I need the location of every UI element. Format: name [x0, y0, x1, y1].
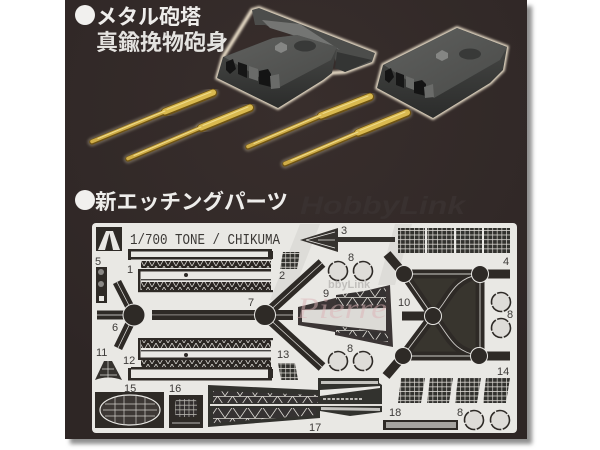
- heading: metal turrets: メタル砲塔: [96, 6, 201, 29]
- part 16: square deck: [169, 395, 203, 428]
- part numbers: 6: [112, 322, 118, 334]
- part numbers: [95, 225, 513, 434]
- part numbers: 16: [169, 383, 181, 395]
- part numbers: 13: [277, 349, 289, 361]
- barrel 3: [248, 96, 370, 147]
- etched photo plate: [92, 223, 517, 434]
- brass barrels: [92, 92, 407, 164]
- dark panel: [65, 0, 527, 439]
- part numbers: 15: [124, 383, 136, 395]
- turret: right: [377, 28, 507, 118]
- part numbers: 1: [127, 264, 133, 276]
- part 11: fan shape: [95, 361, 122, 380]
- turret: left with rear deck: [217, 8, 375, 108]
- part numbers: 18: [389, 407, 401, 419]
- part 13: small grid: [278, 363, 298, 380]
- plate title: 1/700 TONE / CHIKUMA: [130, 232, 280, 249]
- watermark: Pierre script: Pierre: [296, 292, 387, 325]
- part 8: rings: [328, 262, 510, 430]
- heading: new etching parts: 新エッチングパーツ: [95, 190, 288, 214]
- part 10: X-frame: [386, 254, 510, 376]
- part numbers: 3: [341, 225, 347, 237]
- part 18: long strip: [383, 420, 458, 430]
- part numbers: 4: [503, 256, 509, 268]
- watermark: HobbyLink on dark: HobbyLink: [300, 192, 466, 220]
- part 14: bottom grids: [398, 378, 510, 403]
- part numbers: 11: [96, 347, 107, 359]
- part numbers: 12: [123, 355, 135, 367]
- part 6: three-arm catapult: [97, 282, 145, 348]
- part numbers: 7: [248, 297, 254, 309]
- part numbers: 2: [279, 270, 285, 282]
- part 2: small grid: [280, 252, 300, 269]
- part numbers: 17: [309, 422, 321, 434]
- barrel 2: [128, 107, 250, 159]
- logo: Aoshima: [96, 227, 122, 251]
- heading: metal turrets: 真鍮挽物砲身: [96, 30, 228, 55]
- part 7: long catapult: [152, 263, 322, 367]
- part 9: tapered truss: [298, 285, 393, 347]
- barrel 4: [285, 112, 407, 164]
- part numbers: 8: [348, 252, 354, 264]
- part numbers: 14: [497, 366, 509, 378]
- watermark: HobbyLink on plate: bbyLink: [328, 279, 371, 291]
- part 17: long truss: [208, 378, 382, 427]
- part numbers: 8: [457, 407, 463, 419]
- part 5: small strip: [96, 267, 107, 303]
- part 1: hull rails: [128, 249, 273, 292]
- part 12: hull rails: [128, 338, 273, 380]
- faint plate reflection: [270, 224, 412, 300]
- part 3: arrow strip: [300, 228, 395, 252]
- panel shadow: [70, 6, 532, 444]
- part 4: top grids: [398, 228, 510, 253]
- part numbers: 8: [347, 343, 353, 355]
- part numbers: 8: [507, 309, 513, 321]
- part 15: oval deck: [95, 392, 164, 428]
- heading: metal turrets: [75, 5, 228, 55]
- part numbers: 5: [95, 256, 101, 268]
- part numbers: 10: [398, 297, 410, 309]
- part numbers: 9: [323, 288, 329, 300]
- barrel 1: [92, 92, 213, 142]
